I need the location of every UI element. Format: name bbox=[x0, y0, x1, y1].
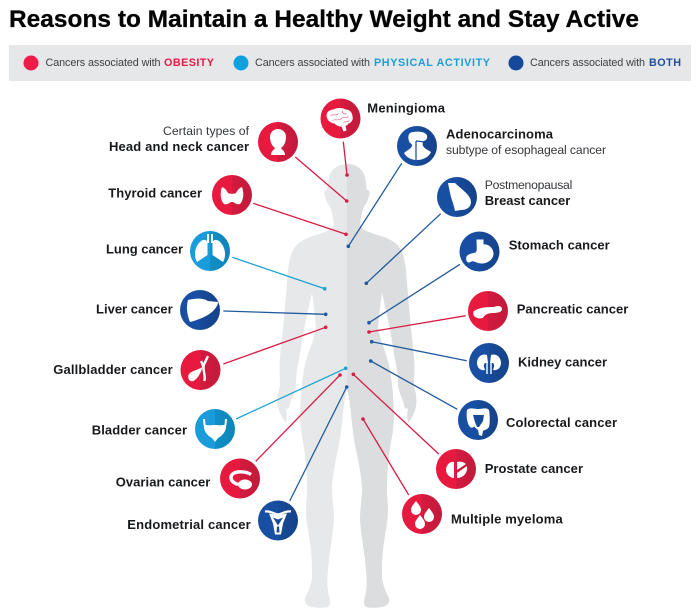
label: endometrial cancer: Endometrial cancer bbox=[127, 517, 251, 532]
line: meningioma bbox=[343, 142, 349, 177]
label: gallbladder cancer: Gallbladder cancer bbox=[53, 362, 173, 377]
title: Reasons to Maintain a Healthy Weight and Stay Active bbox=[9, 6, 639, 33]
icon: ovary bbox=[220, 458, 260, 498]
line: prostate bbox=[352, 372, 439, 454]
label: adenocarcinoma bbox=[446, 126, 606, 157]
label: head and neck cancer: Certain types of bbox=[163, 124, 250, 138]
line: head and neck bbox=[295, 157, 349, 203]
line: kidney bbox=[370, 340, 467, 361]
legend item: physical activity: PHYSICAL ACTIVITY bbox=[374, 57, 491, 69]
label: head and neck cancer bbox=[109, 124, 250, 154]
line: liver bbox=[223, 311, 328, 316]
line: colorectal bbox=[369, 359, 457, 409]
label: adenocarcinoma: Adenocarcinoma bbox=[446, 126, 554, 141]
label: colorectal cancer: Colorectal cancer bbox=[506, 415, 617, 430]
legend item: obesity bbox=[24, 56, 215, 70]
label: pancreatic cancer: Pancreatic cancer bbox=[517, 302, 628, 317]
label: head and neck cancer: Head and neck cancer bbox=[109, 139, 249, 154]
icon: uterus bbox=[258, 500, 298, 540]
label: ovarian cancer: Ovarian cancer bbox=[116, 475, 210, 490]
legend item: obesity: OBESITY bbox=[164, 57, 215, 69]
icon: stomach bbox=[460, 232, 500, 272]
legend item: both: BOTH bbox=[649, 57, 681, 69]
label: adenocarcinoma: subtype of esophageal cancer bbox=[446, 143, 606, 157]
label: breast cancer: Breast cancer bbox=[485, 193, 570, 208]
label: kidney cancer: Kidney cancer bbox=[518, 355, 607, 370]
line: stomach bbox=[367, 264, 460, 325]
icon: prostate bbox=[436, 449, 476, 489]
legend item: physical activity bbox=[234, 56, 491, 70]
label: lung cancer: Lung cancer bbox=[106, 242, 183, 257]
icon: meningioma brain bbox=[320, 98, 360, 138]
connector lines bbox=[223, 142, 467, 501]
icon: thyroid bbox=[212, 175, 252, 215]
line: gallbladder bbox=[223, 326, 328, 364]
icon: liver bbox=[180, 290, 220, 330]
human body silhouette bbox=[278, 164, 416, 608]
line: thyroid bbox=[253, 203, 348, 236]
icon: breast bbox=[437, 177, 477, 217]
line: breast bbox=[364, 214, 441, 285]
line: bladder bbox=[236, 366, 348, 419]
legend item: obesity: Cancers associated with bbox=[46, 57, 160, 69]
label: thyroid cancer: Thyroid cancer bbox=[108, 186, 202, 201]
legend bbox=[9, 45, 691, 81]
line: adenocarcinoma bbox=[346, 163, 402, 248]
icon: bladder bbox=[195, 409, 235, 449]
legend item: physical activity: Cancers associated with bbox=[255, 57, 370, 69]
line: pancreatic bbox=[367, 316, 466, 334]
line: endometrial bbox=[290, 385, 349, 501]
icon: kidneys bbox=[469, 343, 509, 383]
label: meningioma: Meningioma bbox=[367, 101, 446, 116]
legend item: both bbox=[508, 56, 681, 70]
label: stomach cancer: Stomach cancer bbox=[509, 237, 610, 252]
icon: blood drops bbox=[402, 494, 442, 534]
icon: gallbladder bbox=[180, 350, 220, 390]
icon: lungs bbox=[190, 231, 230, 271]
label: prostate cancer: Prostate cancer bbox=[485, 461, 583, 476]
legend item: both: Cancers associated with bbox=[530, 57, 645, 69]
line: lung bbox=[232, 257, 327, 291]
line: multiple myeloma bbox=[361, 417, 409, 495]
line: ovarian bbox=[256, 373, 342, 461]
icon: adenocarcinoma bbox=[397, 126, 437, 166]
icon: colon bbox=[458, 400, 498, 440]
label: liver cancer: Liver cancer bbox=[96, 302, 173, 317]
label: breast cancer: Postmenopausal bbox=[485, 178, 572, 192]
label: multiple myeloma: Multiple myeloma bbox=[451, 512, 563, 527]
label: breast cancer bbox=[485, 178, 572, 208]
icon: head and neck bbox=[258, 122, 298, 162]
icon: pancreas bbox=[468, 291, 508, 331]
label: bladder cancer: Bladder cancer bbox=[92, 422, 187, 437]
